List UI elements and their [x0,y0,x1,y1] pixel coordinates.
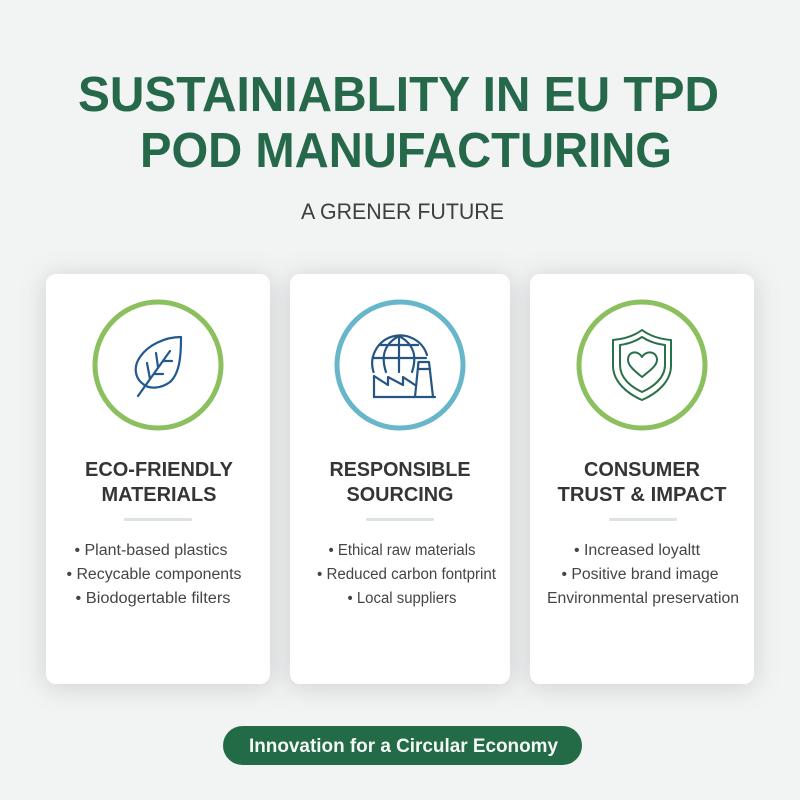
bullet list: • Plant-based plastics [74,542,228,559]
heading: ECO-FRIENDLY [85,459,234,481]
bullet list: • Increased loyaltt [574,542,701,559]
panel: responsible sourcing [290,274,510,684]
panel: consumer trust and impact [530,274,754,684]
icon: leaf in green ring [95,302,221,428]
bullet list: • Recycable components [66,566,242,583]
bullet list [317,542,497,607]
title: SUSTAINIABLITY IN EU TPD [78,67,719,122]
heading [85,459,234,506]
heading [330,459,470,506]
bullet list [547,542,739,607]
heading: CONSUMER [584,459,701,481]
subtitle: A GRENER FUTURE [301,199,504,224]
panel: eco-friendly materials [46,274,270,684]
bullet list: Environmental preservation [547,590,739,607]
bullet list: • Local suppliers [348,590,457,607]
bullet list: • Biodogertable filters [76,590,231,607]
heading: RESPONSIBLE [330,459,470,481]
heading: TRUST & IMPACT [558,484,726,506]
bullet list [66,542,242,607]
bullet list: • Ethical raw materials [328,542,476,559]
bullet list: • Reduced carbon fontprint [317,566,497,583]
heading [558,459,726,506]
icon: shield with heart in green ring [579,302,705,428]
footer banner [223,726,582,765]
icon: globe and factory in blue ring [337,302,463,428]
title [78,67,719,178]
bullet list: • Positive brand image [562,566,718,583]
heading: MATERIALS [102,484,216,506]
title: POD MANUFACTURING [140,123,672,178]
heading: SOURCING [346,484,454,506]
footer banner: Innovation for a Circular Economy [249,736,558,757]
